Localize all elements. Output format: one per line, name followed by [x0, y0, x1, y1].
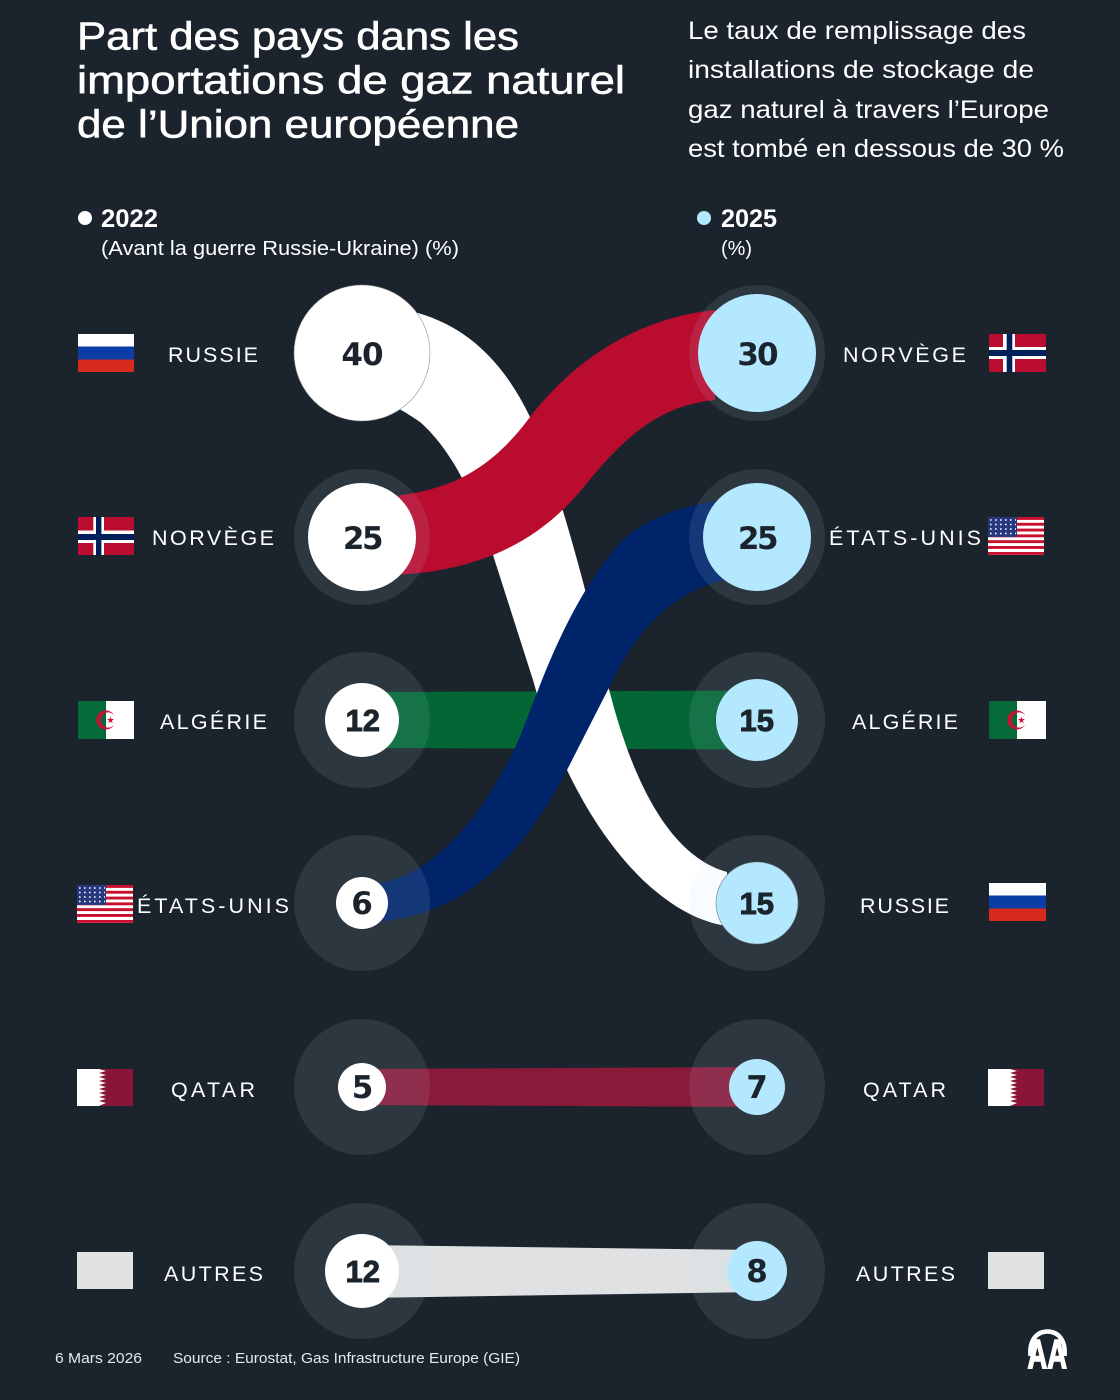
- legend: 2022: 2022: [101, 205, 158, 233]
- ribbon: Autres: [362, 1245, 757, 1298]
- row: Qatar 2022: [77, 1063, 386, 1111]
- circle value: [325, 1234, 399, 1308]
- circle value: [716, 862, 798, 944]
- legend: 2022: (Avant la guerre Russie-Ukraine) (%): [101, 238, 459, 260]
- label: AUTRES: [856, 1262, 955, 1286]
- icon: Anadolu Agency logo: [1028, 1331, 1067, 1377]
- label: ALGÉRIE: [852, 709, 958, 734]
- flag: Algeria: [78, 701, 134, 739]
- circle value: 25: [343, 521, 382, 557]
- label: QATAR: [863, 1078, 946, 1102]
- flag: Russia: [78, 334, 134, 372]
- ribbon: États-Unis: [375, 501, 725, 922]
- title: Part des pays dans les: [77, 16, 519, 58]
- flag: USA: [988, 517, 1044, 555]
- flag: placeholder grey: [77, 1252, 133, 1289]
- circle value: [716, 679, 798, 761]
- flag: Qatar: [988, 1069, 1044, 1106]
- label: QATAR: [171, 1078, 255, 1102]
- footer: source: Source : Eurostat, Gas Infrastructure Europe (GIE): [173, 1350, 520, 1367]
- circle value: 5: [352, 1070, 373, 1106]
- circle value: 15: [740, 703, 774, 738]
- label: ALGÉRIE: [160, 709, 267, 734]
- row: Autres 2022: [77, 1234, 399, 1308]
- label: ÉTATS-UNIS: [137, 893, 289, 918]
- text block: storage note: [688, 17, 1064, 163]
- flag: placeholder grey: [988, 1252, 1044, 1289]
- text block: storage note: installations de stockage de: [688, 56, 1034, 84]
- circle value: 15: [740, 886, 774, 921]
- flag: Norway: [989, 334, 1046, 372]
- row: États-Unis 2022: [77, 877, 388, 929]
- halos: left column: [294, 469, 430, 1339]
- circle value: 8: [746, 1254, 768, 1290]
- ribbon: Qatar: [362, 1067, 757, 1107]
- circle value: [727, 1241, 787, 1301]
- label: NORVÈGE: [152, 525, 274, 550]
- row: Russie 2025: [716, 862, 1046, 944]
- circle value: [698, 294, 816, 412]
- circle value: [729, 1059, 785, 1115]
- legend: 2025: [697, 205, 777, 260]
- label: RUSSIE: [168, 343, 258, 367]
- label: NORVÈGE: [843, 342, 966, 367]
- legend: 2022: [78, 205, 459, 260]
- circle value: 12: [346, 1254, 380, 1289]
- footer: date: 6 Mars 2026: [55, 1350, 142, 1367]
- circle value: [308, 483, 416, 591]
- circle value: [703, 483, 811, 591]
- title: de l’Union européenne: [77, 104, 519, 146]
- label: RUSSIE: [860, 894, 949, 918]
- circle value: [338, 1063, 386, 1111]
- flag: Norway: [78, 517, 134, 555]
- flag: Russia: [989, 883, 1046, 921]
- circle value: [325, 683, 399, 757]
- flag: Qatar: [77, 1069, 133, 1106]
- flag: USA: [77, 885, 133, 923]
- text block: storage note: Le taux de remplissage des: [688, 17, 1026, 45]
- legend: 2025: 2025: [721, 205, 777, 233]
- title: importations de gaz naturel: [77, 60, 625, 102]
- ribbon: Norvège: [395, 310, 715, 575]
- circle value: 30: [737, 337, 778, 373]
- row: Qatar 2025: [729, 1059, 1044, 1115]
- row: États-Unis 2025: [703, 483, 1044, 591]
- row: Norvège 2025: [698, 294, 1046, 412]
- circle value: 40: [341, 337, 383, 373]
- halos: right column: [689, 285, 825, 1339]
- ribbon: Algérie: [362, 690, 757, 750]
- row: Norvège 2022: [78, 483, 416, 591]
- row: Algérie 2022: [78, 683, 399, 757]
- circle value: 12: [346, 703, 380, 738]
- label: AUTRES: [164, 1262, 263, 1286]
- circle value: [336, 877, 388, 929]
- ribbon: Russie: [395, 310, 727, 926]
- row: Autres 2025: [727, 1241, 1044, 1301]
- row: Algérie 2025: [716, 679, 1046, 761]
- circle value: 7: [746, 1070, 768, 1106]
- row: Russie 2022: [78, 285, 430, 421]
- label: ÉTATS-UNIS: [829, 525, 981, 550]
- circle value: [294, 285, 430, 421]
- legend: 2025: (%): [721, 238, 752, 260]
- circle value: 6: [351, 886, 373, 922]
- text block: storage note: est tombé en dessous de 30 %: [688, 135, 1064, 163]
- circle value: 25: [738, 521, 777, 557]
- icon: Anadolu Agency logo: AA: [1028, 1331, 1067, 1377]
- title: [77, 16, 625, 146]
- text block: storage note: gaz naturel à travers l’Europe: [688, 96, 1049, 124]
- flag: Algeria: [989, 701, 1046, 739]
